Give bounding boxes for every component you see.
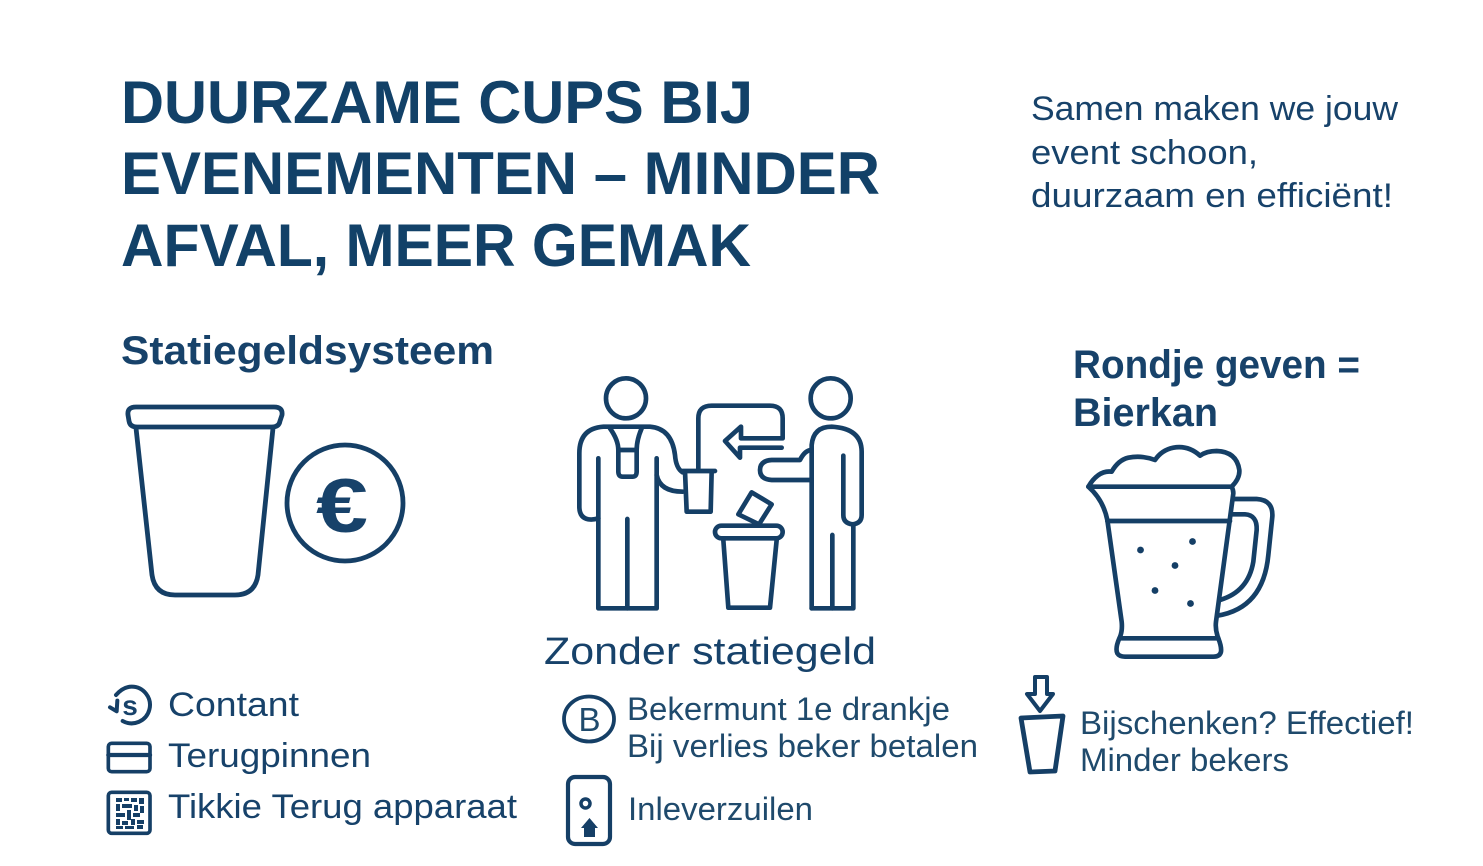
icon: beer pitcher [1088, 447, 1272, 657]
icon: cup with euro coin: € [316, 464, 368, 549]
item: Bekermunt [564, 691, 978, 764]
item: Bijschenken [1021, 677, 1414, 778]
heading: Rondje geven: Rondje geven = [1073, 343, 1360, 387]
heading: Rondje geven: Bierkan [1073, 391, 1218, 435]
item: Inleverzuilen [568, 777, 813, 844]
title: EVENEMENTEN – MINDER [121, 140, 880, 207]
item: Tikkie Terug apparaat [108, 788, 518, 833]
heading: Statiegeldsysteem: Statiegeldsysteem [121, 329, 494, 373]
item: Terugpinnen: Terugpinnen [168, 737, 371, 775]
title: AFVAL, MEER GEMAK [121, 212, 751, 279]
item: Contant [110, 686, 300, 724]
item: Bijschenken: Minder bekers [1080, 742, 1289, 778]
icon: cup with euro coin [128, 407, 403, 595]
item: Contant: s [122, 690, 138, 721]
icon: staff, guest, cup and bin [579, 378, 862, 608]
title: DUURZAME CUPS BIJ [121, 69, 753, 136]
heading: Zonder statiegeld: Zonder statiegeld [544, 631, 876, 673]
title [121, 69, 880, 279]
item: Bekermunt: Bekermunt 1e drankje [627, 691, 950, 727]
tagline: event schoon, [1031, 134, 1258, 172]
item: Inleverzuilen: Inleverzuilen [628, 791, 813, 827]
item: Tikkie Terug apparaat: Tikkie Terug apparaat [168, 788, 518, 826]
tagline [1031, 90, 1398, 215]
tagline: duurzaam en efficiënt! [1031, 177, 1393, 215]
icon: beer bubbles [1137, 538, 1196, 607]
tagline: Samen maken we jouw [1031, 90, 1398, 128]
item: Contant: Contant [168, 686, 300, 724]
item: Bijschenken: Bijschenken? Effectief! [1080, 705, 1414, 741]
item: Bekermunt: Bij verlies beker betalen [627, 728, 978, 764]
heading: Rondje geven [1073, 343, 1360, 435]
item: Bekermunt: B [578, 701, 601, 738]
